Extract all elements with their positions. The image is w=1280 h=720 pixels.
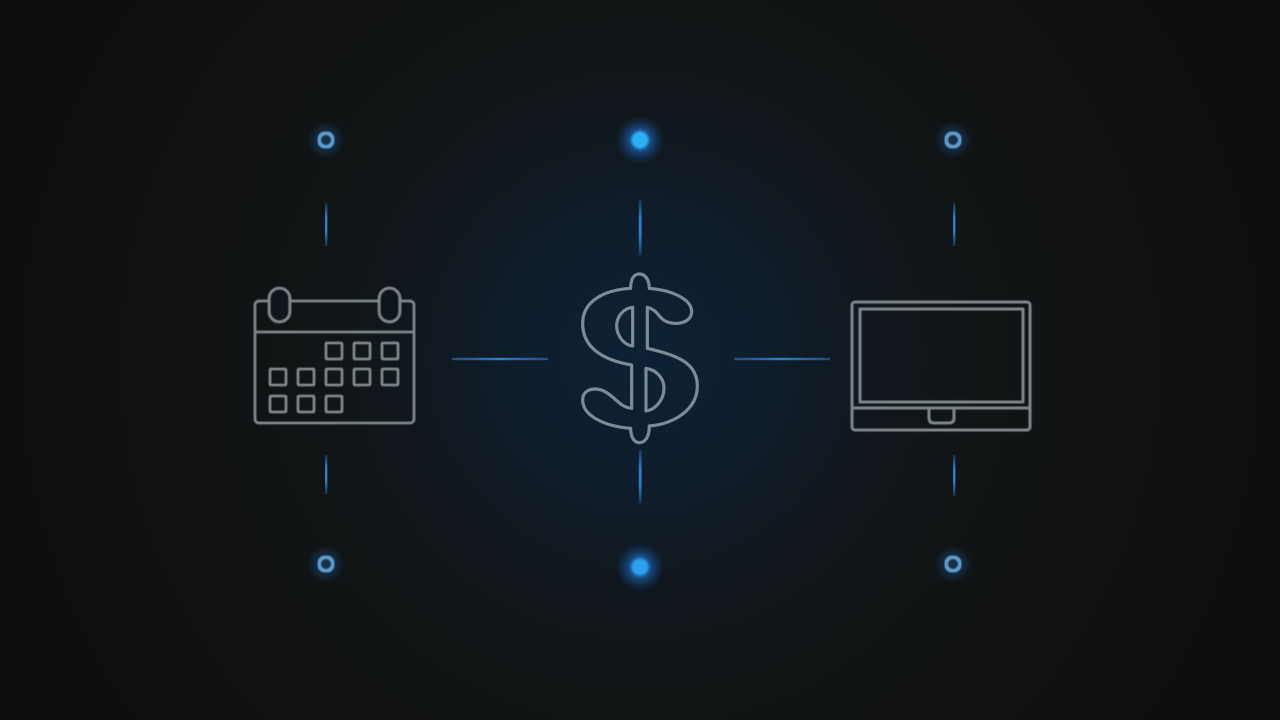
icon: laptop <box>852 302 1030 430</box>
node: top centre glow <box>615 115 665 165</box>
node: top right ring <box>934 121 972 159</box>
node: top left ring <box>307 121 345 159</box>
node: bottom left ring <box>307 545 345 583</box>
icon: calendar <box>255 288 414 423</box>
node: bottom centre glow <box>615 542 665 592</box>
icon: dollar sign <box>583 274 697 443</box>
node: bottom right ring <box>934 545 972 583</box>
connector lines <box>325 200 955 503</box>
